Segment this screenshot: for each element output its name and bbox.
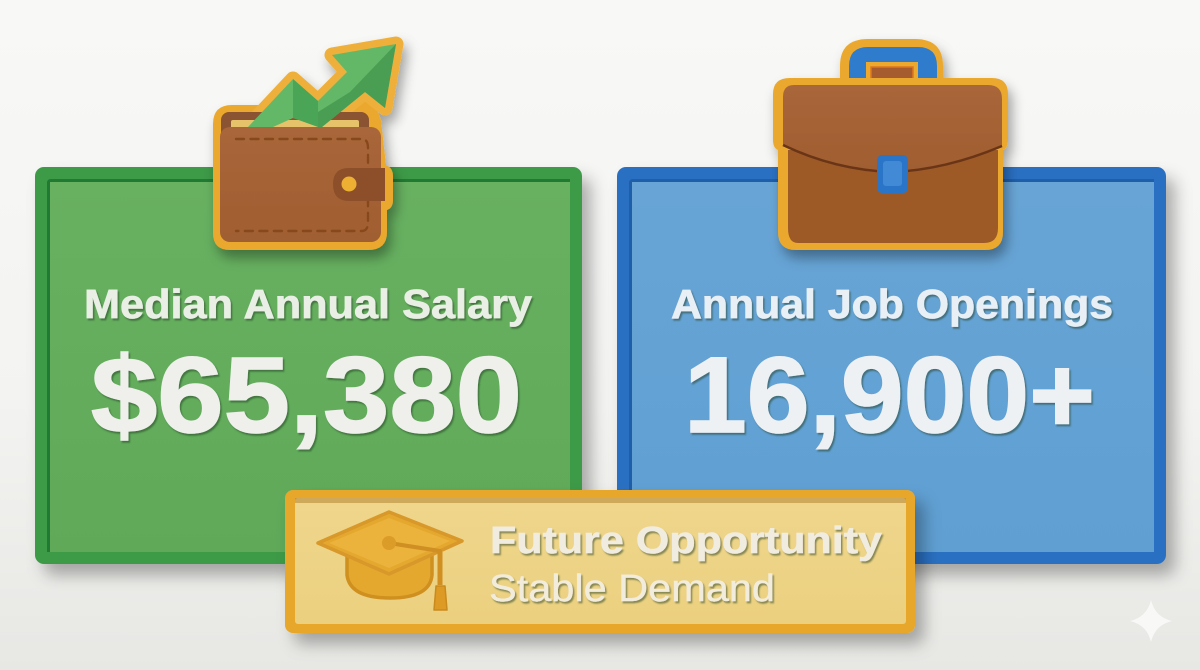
panel: future opportunity [285, 490, 915, 633]
arrow outline [248, 44, 396, 127]
icon: briefcase [773, 39, 1008, 250]
panel: annual job openings [617, 167, 1166, 564]
rising arrow [248, 44, 396, 127]
wallet front [220, 127, 381, 242]
heading: annual job openings: Annual Job Openings [671, 281, 1113, 327]
briefcase body [788, 150, 998, 243]
icon: graduation cap [318, 512, 462, 610]
briefcase outline [773, 78, 1008, 250]
wallet back pocket [221, 112, 369, 152]
text: future opportunity: Future Opportunity [490, 520, 882, 562]
wallet outline [213, 98, 393, 250]
text: stable demand: Stable Demand [489, 568, 775, 610]
panel: median annual salary [35, 167, 582, 564]
icon: sparkle mark [1130, 600, 1172, 642]
stat: job openings value: 16,900+ [684, 334, 1095, 455]
heading: median annual salary: Median Annual Salary [84, 281, 532, 327]
briefcase flap [783, 85, 1002, 172]
stat: salary value: $65,380 [91, 334, 522, 455]
briefcase handle [840, 39, 943, 82]
icon: wallet with rising arrow [213, 44, 396, 250]
wallet clasp [333, 168, 385, 201]
briefcase clasp [877, 155, 908, 193]
